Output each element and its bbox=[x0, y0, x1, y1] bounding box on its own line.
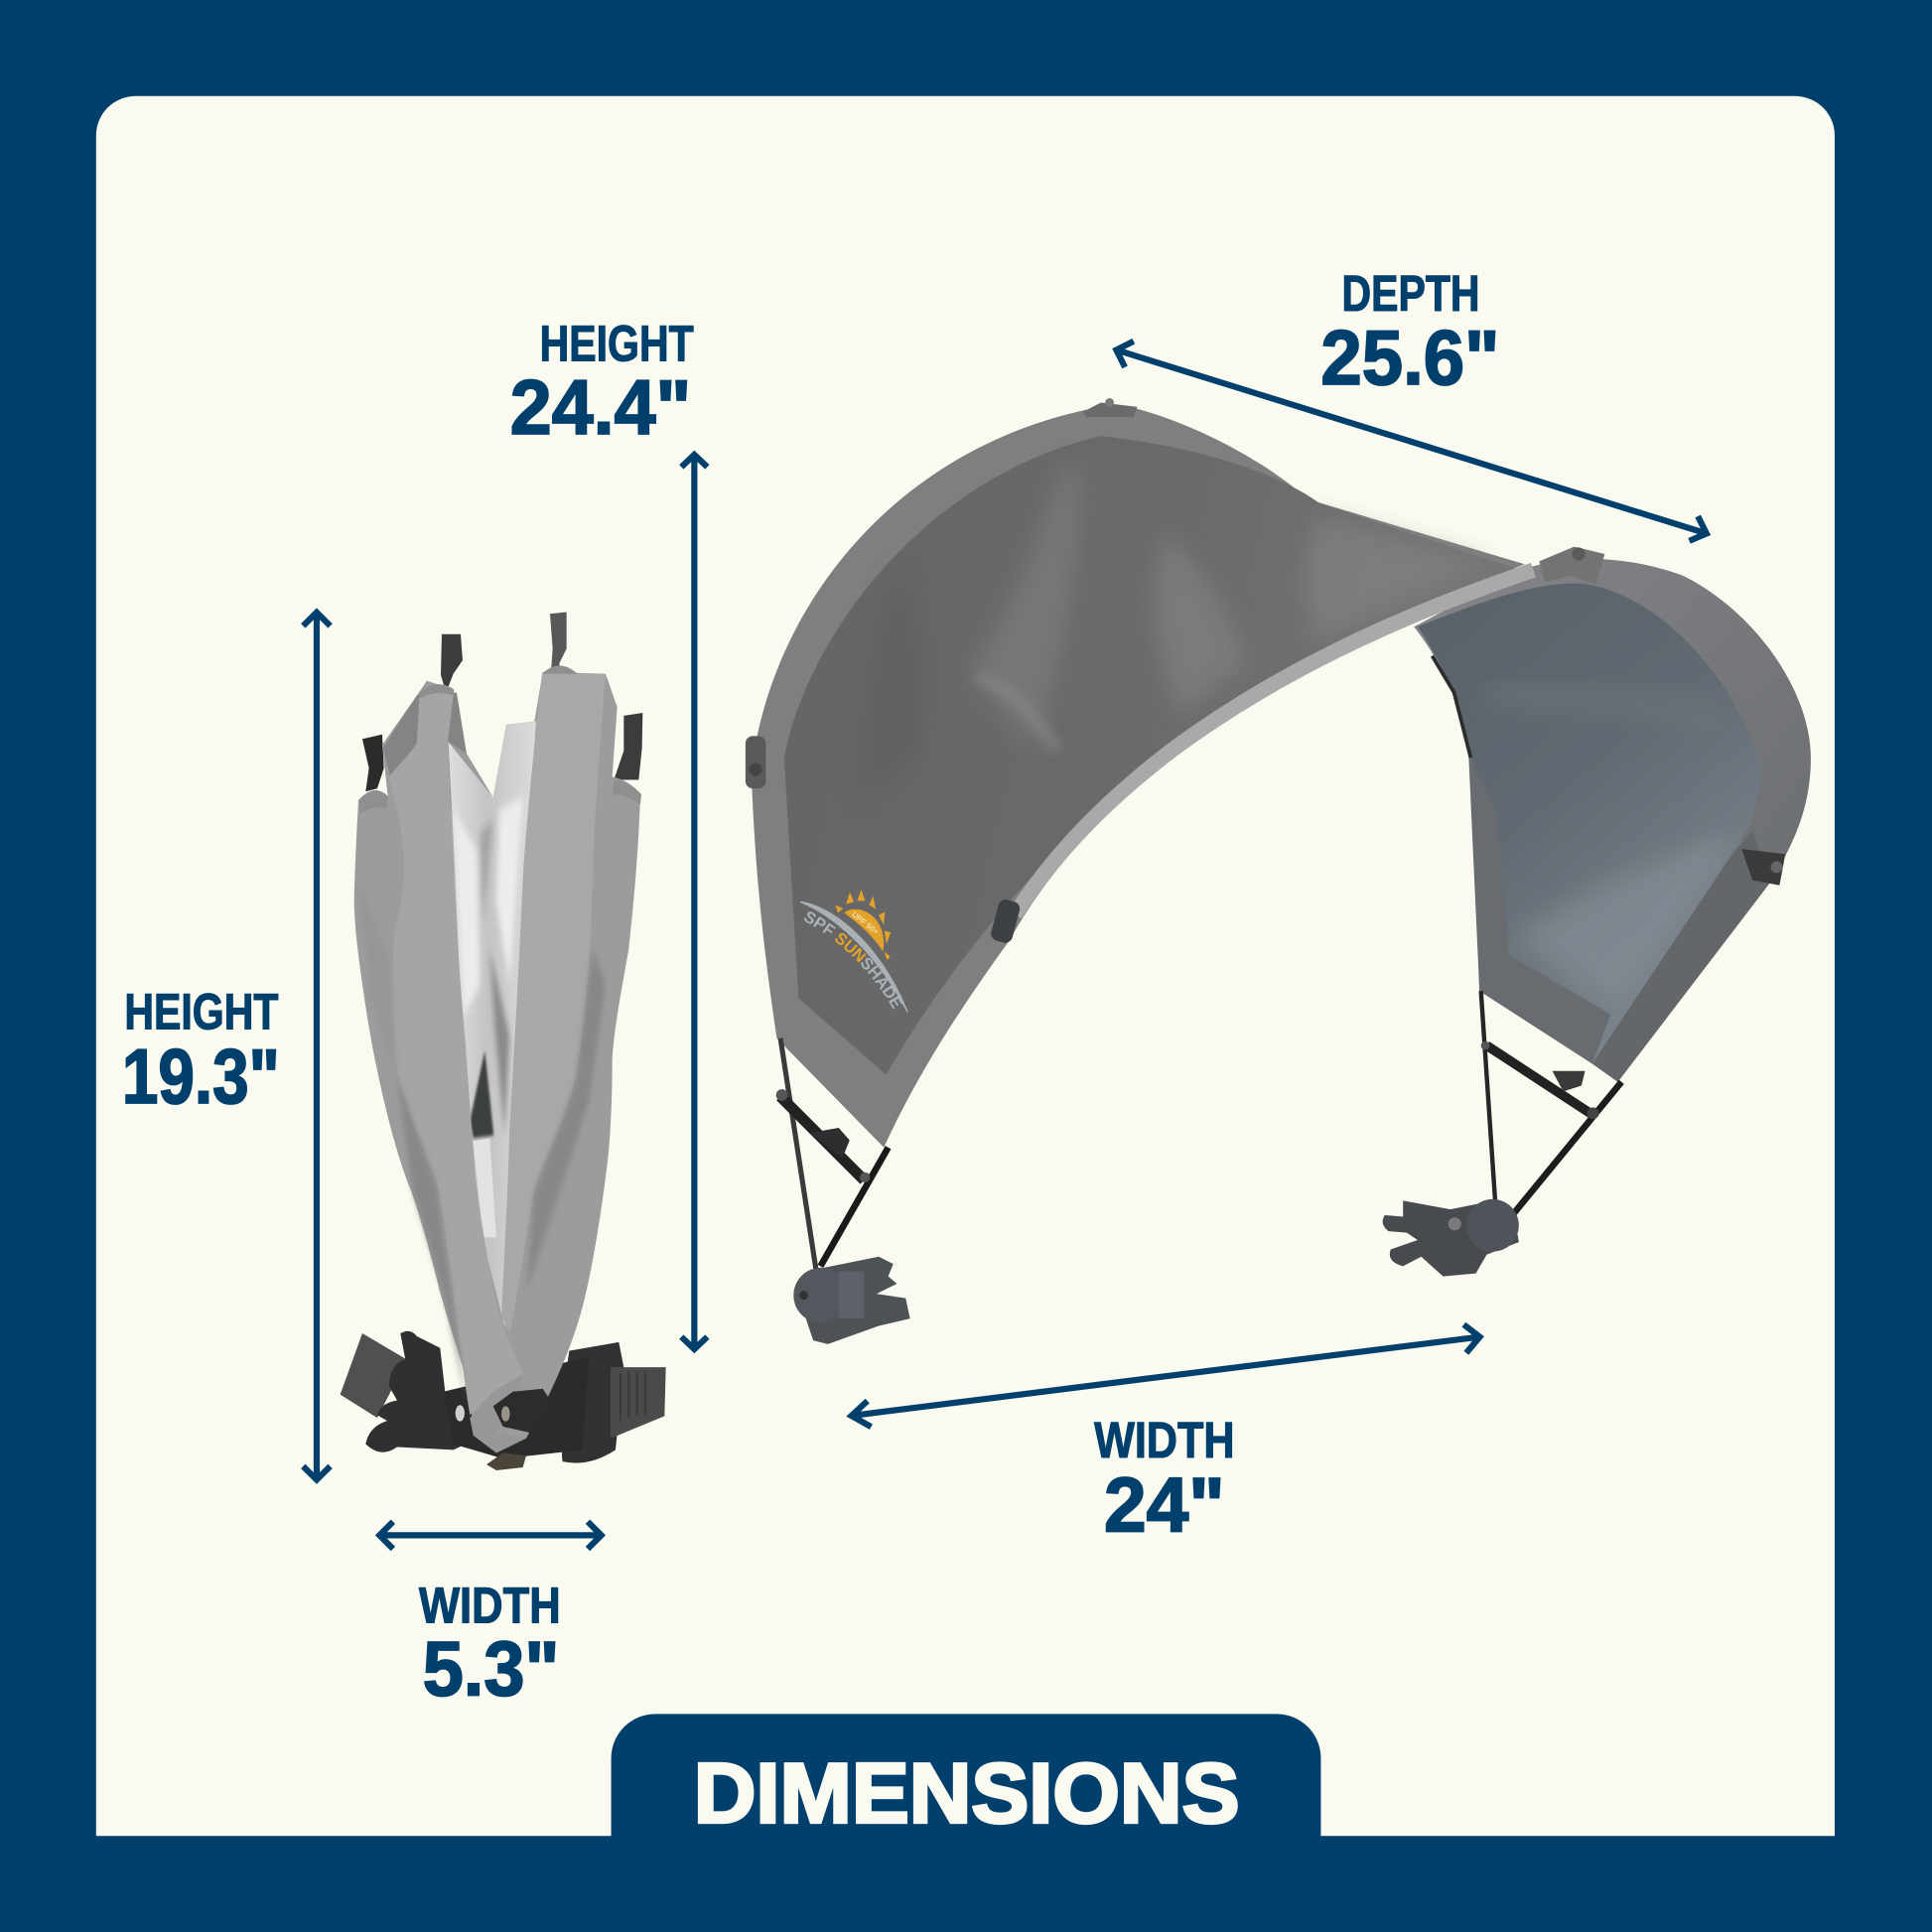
left frame legs and clamp bbox=[776, 1038, 910, 1344]
folded knob hardware bbox=[362, 612, 642, 791]
folded right flap bbox=[501, 674, 606, 1333]
folded upper dark fabric bbox=[383, 692, 467, 777]
folded bottom knob bbox=[456, 1389, 554, 1470]
right frame legs and clamp bbox=[1383, 991, 1621, 1277]
folded fold shadows bbox=[357, 879, 606, 1403]
folded left flap bbox=[389, 684, 523, 1415]
label: depth: DEPTH bbox=[1342, 265, 1480, 322]
title text: DIMENSIONS bbox=[694, 1746, 1240, 1842]
label: depth: 25.6" bbox=[1320, 314, 1499, 401]
title tab bbox=[612, 1714, 1320, 1842]
SPF SunShade logo: UPF 50+ bbox=[850, 909, 881, 936]
arrow: folded width bbox=[379, 1522, 602, 1549]
SPF SunShade logo: SPF SUNSHADE bbox=[804, 911, 902, 1009]
inner dark gap bbox=[470, 1050, 493, 1138]
open sun shade product bbox=[745, 358, 1811, 1344]
label: open height: HEIGHT bbox=[540, 316, 694, 372]
right canopy wing bbox=[1414, 559, 1811, 1082]
label: open height bbox=[510, 316, 694, 451]
folded base clamps bbox=[341, 1331, 666, 1463]
label: folded width: 5.3" bbox=[423, 1625, 559, 1713]
fabric wrinkle highlights bbox=[861, 460, 1487, 801]
main canopy dark panel bbox=[784, 436, 1516, 1074]
arrow: depth bbox=[1116, 342, 1707, 541]
arrow: folded height bbox=[303, 613, 331, 1480]
folded centre silver lining bbox=[449, 722, 536, 1327]
arrow: open height bbox=[681, 455, 707, 1349]
label: folded width: WIDTH bbox=[419, 1577, 561, 1633]
arrow: open width bbox=[852, 1324, 1480, 1427]
main canopy outer fabric bbox=[752, 407, 1525, 1148]
label: open width bbox=[1094, 1412, 1235, 1549]
canopy hardware knobs bbox=[746, 398, 1785, 944]
label: open width: 24" bbox=[1104, 1461, 1225, 1549]
label: folded height: HEIGHT bbox=[124, 983, 278, 1039]
folded sun shade product bbox=[341, 612, 666, 1470]
label: folded height: 19.3" bbox=[122, 1033, 280, 1120]
folded back fabric bbox=[354, 672, 640, 1452]
label: open width: WIDTH bbox=[1094, 1412, 1235, 1468]
label: folded width bbox=[419, 1577, 561, 1713]
folded top collars bbox=[359, 665, 641, 814]
light front hem band bbox=[1015, 570, 1533, 914]
label: open height: 24.4" bbox=[510, 363, 691, 451]
label: depth bbox=[1320, 265, 1499, 401]
label: folded height bbox=[122, 983, 280, 1120]
folded bottom sleeve bbox=[470, 1374, 526, 1452]
silver lining folds bbox=[454, 797, 523, 1136]
